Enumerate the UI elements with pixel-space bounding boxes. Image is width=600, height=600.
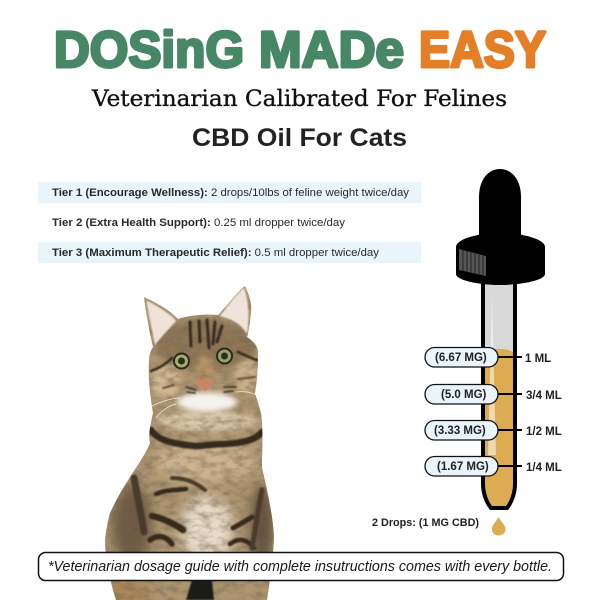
lower shadow between paws	[186, 580, 214, 600]
tier 3 row	[38, 242, 421, 263]
fur tones	[100, 319, 273, 600]
product heading: CBD Oil For Cats	[192, 124, 407, 152]
marker 3/4 ml	[425, 384, 562, 404]
cap grip	[459, 249, 486, 276]
eyes	[173, 348, 233, 370]
dropper	[456, 169, 545, 508]
glass highlight	[488, 296, 496, 455]
marker 1 ml: (6.67 MG)	[435, 352, 487, 364]
marker 1 ml: 1 ML	[525, 353, 551, 365]
marker 1/2 ml: (3.33 MG)	[434, 425, 486, 437]
glass tube	[483, 283, 515, 508]
subtitle: Veterinarian Calibrated For Felines	[91, 87, 507, 112]
title: DOSinG	[54, 21, 244, 78]
title: MADe	[259, 21, 404, 78]
marker 1/4 ml	[425, 456, 562, 476]
marker 1 ml	[425, 348, 551, 367]
drop label: 2 Drops: (1 MG CBD)	[372, 517, 479, 529]
cat photo illustration	[100, 280, 280, 600]
note box: *Veterinarian dosage guide with complete insutructions comes with every bottle.	[48, 558, 552, 575]
tier 1 row	[38, 182, 421, 203]
tier 2 row: Tier 2 (Extra Health Support): 0.25 ml dropper twice/day	[52, 217, 346, 229]
marker 1/2 ml: 1/2 ML	[526, 426, 562, 438]
whiskers	[152, 392, 258, 418]
bulb	[479, 169, 521, 240]
tier 1 row: Tier 1 (Encourage Wellness): 2 drops/10lbs of feline weight twice/day	[52, 187, 410, 199]
ears	[146, 288, 248, 345]
fur mottling	[100, 300, 280, 600]
title: EASY	[419, 21, 546, 78]
cap	[456, 233, 545, 285]
oil	[485, 349, 513, 507]
note box	[38, 552, 564, 580]
oil drop	[492, 517, 506, 536]
tier 3 row: Tier 3 (Maximum Therapeutic Relief): 0.5 ml dropper twice/day	[52, 247, 380, 259]
marker 3/4 ml: (5.0 MG)	[441, 389, 487, 401]
dosage tiers	[38, 182, 421, 263]
scale markers	[425, 348, 562, 476]
marker 1/4 ml: (1.67 MG)	[437, 461, 489, 473]
muzzle highlight	[177, 392, 237, 412]
title	[54, 21, 546, 78]
tube outline	[483, 283, 515, 508]
marker 3/4 ml: 3/4 ML	[526, 390, 562, 402]
tabby stripes	[134, 320, 262, 548]
marker 1/4 ml: 1/4 ML	[526, 462, 562, 474]
marker 1/2 ml	[425, 420, 562, 440]
nose	[196, 379, 214, 391]
